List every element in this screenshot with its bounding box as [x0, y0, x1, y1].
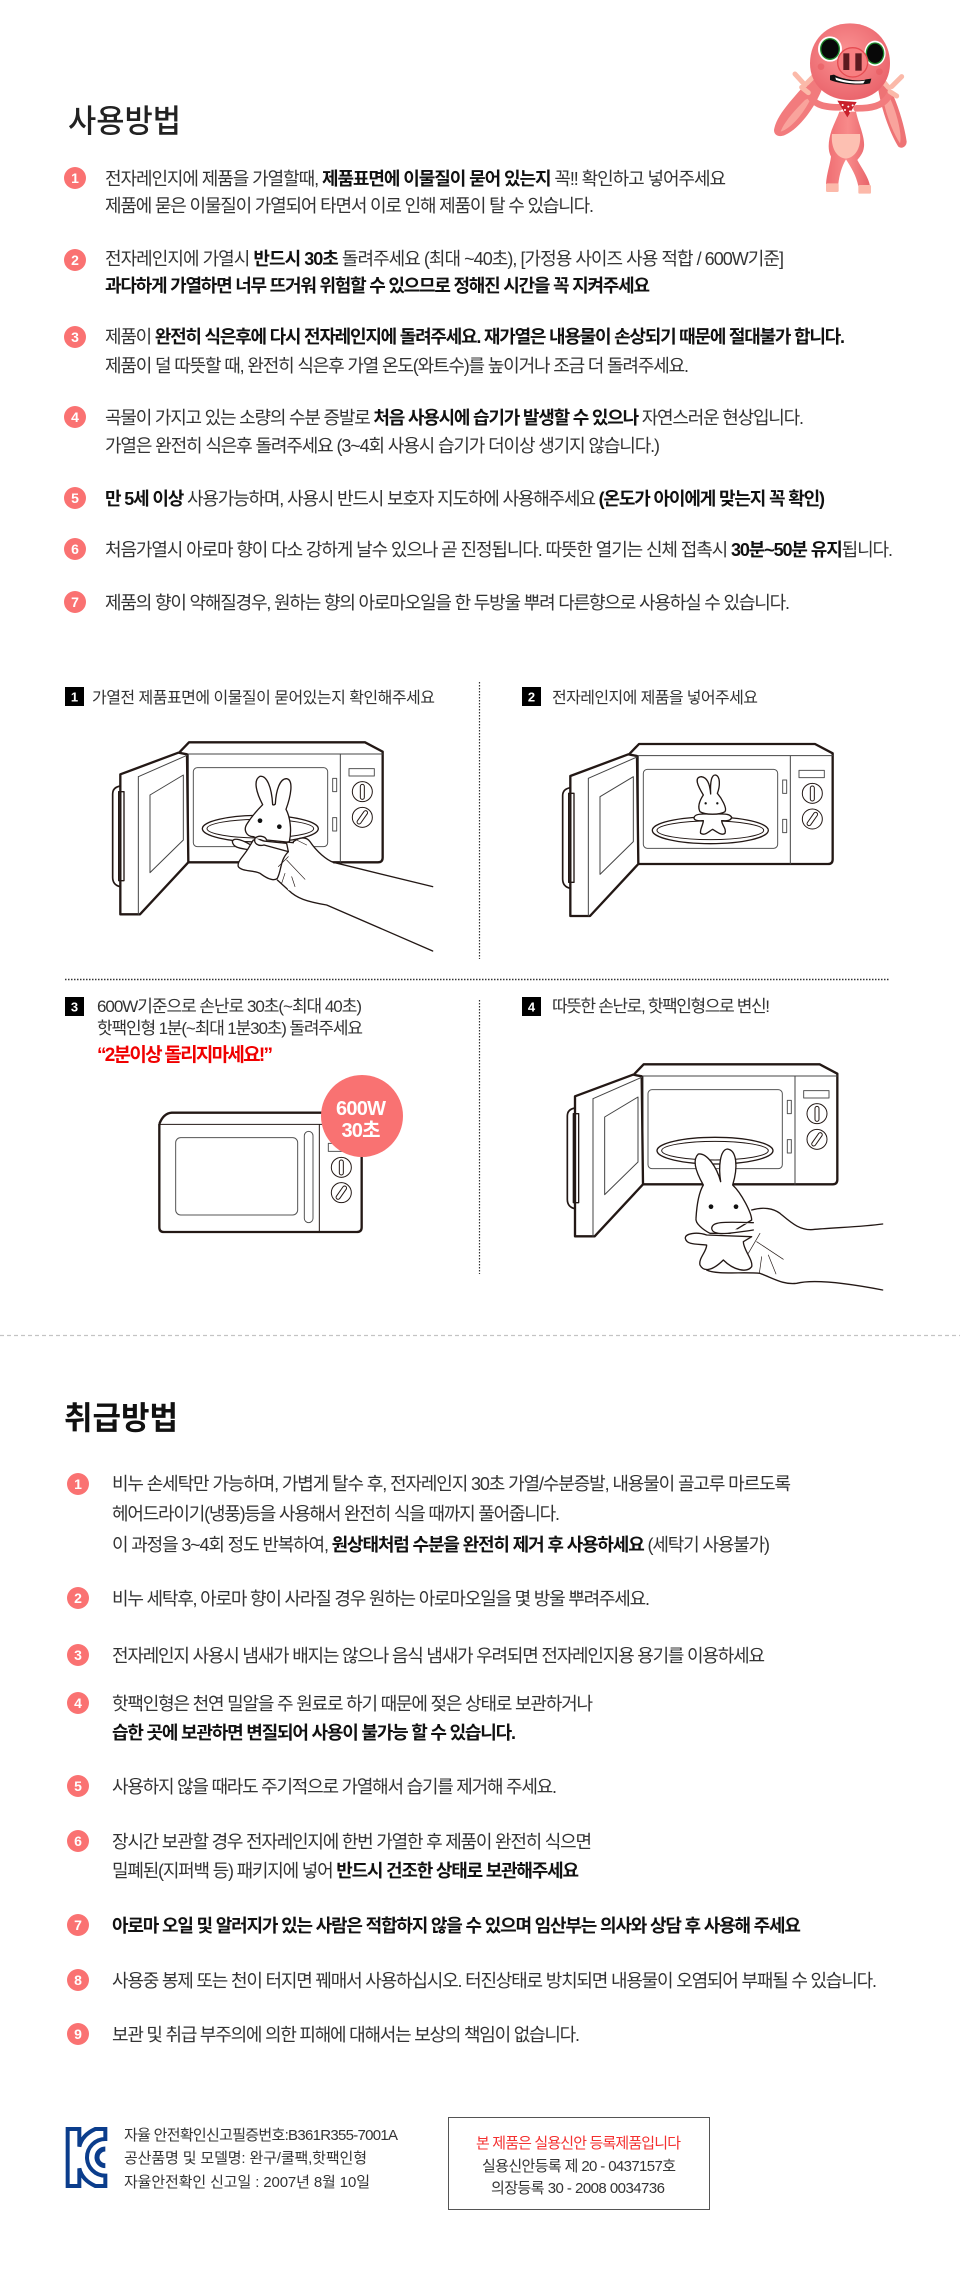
usage item 4: 4: [71, 409, 79, 425]
care item 1: 비누 손세탁만 가능하며, 가볍게 탈수 후, 전자레인지 30초 가열/수분증발, 내용물이 골고루 마르도록: [112, 1474, 791, 1494]
safety certification text: 자율 안전확인신고필증번호:B361R355-7001A: [124, 2127, 398, 2144]
safety certification text: [124, 2127, 398, 2191]
step 1 heading: 1: [71, 690, 78, 704]
step 3 heading and instructions: 핫팩인형 1분(~최대 1분30초) 돌려주세요: [97, 1019, 363, 1038]
usage item 6: 처음가열시 아로마 향이 다소 강하게 날수 있으나 곧 진정됩니다. 따뜻한 열기는 신체 접촉시 30분~50분 유지됩니다.: [105, 540, 893, 560]
safety certification text: 공산품명 및 모델명: 완구/쿨팩,핫팩인형: [124, 2150, 367, 2167]
usage item 1: 1: [71, 170, 79, 186]
care item 2: 비누 세탁후, 아로마 향이 사라질 경우 원하는 아로마오일을 몇 방울 뿌려주세요.: [112, 1589, 650, 1609]
care item 1: [67, 1473, 791, 1555]
care item 3: 3: [74, 1647, 82, 1663]
care item 6: [67, 1830, 592, 1881]
usage item 1: [64, 167, 726, 216]
callout: 600W 30초: [321, 1075, 403, 1157]
title: 취급방법: 취급방법: [64, 1400, 178, 1436]
usage item 2: 과다하게 가열하면 너무 뜨거워 위험할 수 있으므로 정해진 시간을 꼭 지켜주세요: [105, 276, 650, 296]
care item 2: 2: [74, 1590, 82, 1606]
step 4 heading: 4: [528, 1000, 536, 1014]
usage item 4: 가열은 완전히 식은후 돌려주세요 (3~4회 사용시 습기가 더이상 생기지 않습니다.): [105, 436, 660, 456]
usage item 7: 제품의 향이 약해질경우, 원하는 향의 아로마오일을 한 두방울 뿌려 다른향으로 사용하실 수 있습니다.: [105, 593, 790, 613]
care item 1: 1: [74, 1476, 82, 1492]
care item 4: 핫팩인형은 천연 밀알을 주 원료로 하기 때문에 젖은 상태로 보관하거나: [112, 1694, 593, 1714]
care item 8: 사용중 봉제 또는 천이 터지면 꿰매서 사용하십시오. 터진상태로 방치되면 내용물이 오염되어 부패될 수 있습니다.: [112, 1971, 877, 1991]
usage item 6: 6: [71, 541, 79, 557]
care item 5: 사용하지 않을 때라도 주기적으로 가열해서 습기를 제거해 주세요.: [112, 1777, 557, 1797]
usage item 2: 전자레인지에 가열시 반드시 30초 돌려주세요 (최대 ~40초), [가정용 사이즈 사용 적합 / 600W기준]: [105, 249, 784, 269]
usage item 3: [64, 326, 845, 376]
step 2 illustration: rabbit inside microwave: [563, 744, 833, 916]
usage item 3: 3: [71, 329, 79, 345]
usage item 1: 제품에 묻은 이물질이 가열되어 타면서 이로 인해 제품이 탈 수 있습니다.: [105, 196, 594, 216]
care item 1: 헤어드라이기(냉풍)등을 사용해서 완전히 식을 때까지 풀어줍니다.: [112, 1504, 560, 1524]
patent registration box: [448, 2118, 710, 2210]
callout: 600W 30초: 30초: [342, 1119, 380, 1142]
step 2 heading: 2: [528, 690, 535, 704]
care item 7: 아로마 오일 및 알러지가 있는 사람은 적합하지 않을 수 있으며 임산부는 의사와 상담 후 사용해 주세요: [112, 1916, 801, 1936]
care item 6: 장시간 보관할 경우 전자레인지에 한번 가열한 후 제품이 완전히 식으면: [112, 1832, 592, 1852]
patent registration box: 본 제품은 실용신안 등록제품입니다: [476, 2135, 681, 2152]
care item 7: 7: [74, 1917, 82, 1933]
usage item 1: 전자레인지에 제품을 가열할때, 제품표면에 이물질이 묻어 있는지 꼭!! 확인하고 넣어주세요: [105, 169, 726, 189]
step 3 heading and instructions: 600W기준으로 손난로 30초(~최대 40초): [97, 997, 362, 1016]
usage item 5: 만 5세 이상 사용가능하며, 사용시 반드시 보호자 지도하에 사용해주세요 (온도가 아이에게 맞는지 꼭 확인): [105, 489, 825, 509]
care item 1: 이 과정을 3~4회 정도 반복하여, 원상태처럼 수분을 완전히 제거 후 사용하세요 (세탁기 사용불가): [112, 1535, 770, 1555]
patent registration box: 의장등록 30 - 2008 0034736: [491, 2180, 665, 2197]
usage item 2: [64, 249, 784, 296]
callout: 600W 30초: 600W: [336, 1098, 386, 1120]
care item 8: 8: [74, 1972, 82, 1988]
step 3 heading and instructions: [65, 997, 363, 1066]
step 4 heading: 따뜻한 손난로, 핫팩인형으로 변신!: [552, 997, 770, 1016]
care item 4: 4: [74, 1695, 82, 1711]
care item 5: 5: [74, 1778, 82, 1794]
care item 4: 습한 곳에 보관하면 변질되어 사용이 불가능 할 수 있습니다.: [112, 1723, 516, 1743]
care item 4: [67, 1692, 593, 1743]
usage item 3: 제품이 덜 따뜻할 때, 완전히 식은후 가열 온도(와트수)를 높이거나 조금 더 돌려주세요.: [105, 356, 689, 376]
title: 사용방법: 사용방법: [68, 103, 181, 139]
patent registration box: 실용신안등록 제 20 - 0437157호: [482, 2158, 676, 2175]
step 3 heading and instructions: 3: [71, 1000, 78, 1014]
mascot: pink pig-rabbit character: [774, 23, 907, 194]
usage item 5: 5: [71, 490, 79, 506]
usage item 4: [64, 406, 804, 456]
usage item 2: 2: [71, 252, 79, 268]
care item 6: 밀폐된(지퍼백 등) 패키지에 넣어 반드시 건조한 상태로 보관해주세요: [112, 1861, 579, 1881]
care item 6: 6: [74, 1833, 82, 1849]
step 1 heading: 가열전 제품표면에 이물질이 묻어있는지 확인해주세요: [92, 689, 435, 707]
care item 3: 전자레인지 사용시 냄새가 배지는 않으나 음식 냄새가 우려되면 전자레인지용 용기를 이용하세요: [112, 1646, 765, 1666]
step 2 heading: 전자레인지에 제품을 넣어주세요: [552, 689, 758, 707]
step 3 illustration: closed microwave: [159, 1113, 362, 1232]
step 3 heading and instructions: “2분이상 돌리지마세요!”: [97, 1044, 273, 1066]
care item 9: 보관 및 취급 부주의에 의한 피해에 대해서는 보상의 책임이 없습니다.: [112, 2025, 580, 2045]
safety certification text: 자율안전확인 신고일 : 2007년 8월 10일: [124, 2174, 370, 2191]
usage item 4: 곡물이 가지고 있는 소량의 수분 증발로 처음 사용시에 습기가 발생할 수 있으나 자연스러운 현상입니다.: [105, 408, 804, 428]
care item 9: 9: [74, 2026, 82, 2042]
step 1 illustration: hand holding rabbit in front of microwave: [113, 742, 433, 951]
icon: KC mark: [68, 2129, 105, 2186]
step 4 illustration: warm rabbit held in hand: [567, 1064, 883, 1290]
usage item 7: 7: [71, 594, 79, 610]
usage item 3: 제품이 완전히 식은후에 다시 전자레인지에 돌려주세요. 재가열은 내용물이 손상되기 때문에 절대불가 합니다.: [105, 327, 845, 347]
